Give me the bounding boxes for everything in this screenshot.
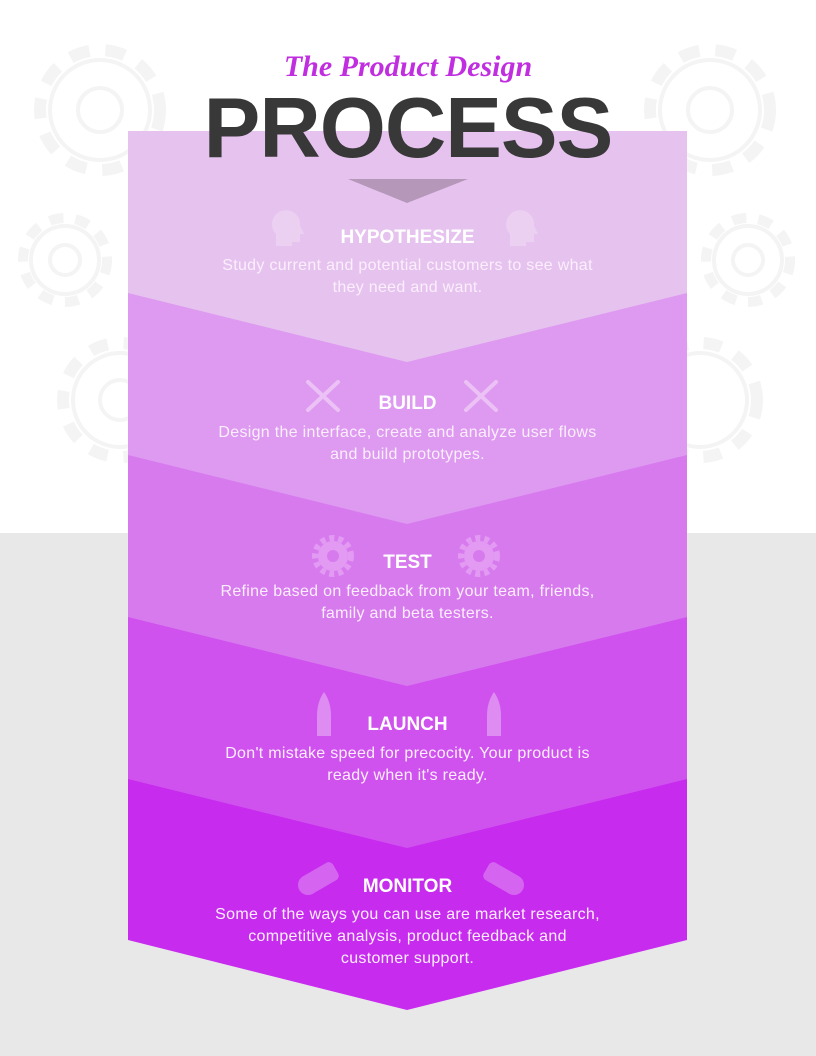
text: Refine based on feedback from your team, friends, [220, 583, 594, 600]
text: Some of the ways you can use are market research, [215, 906, 600, 923]
icon: heads [272, 210, 538, 246]
text: Design the interface, create and analyze user flows [218, 424, 597, 441]
title: PROCESS [204, 81, 612, 176]
step: launch: LAUNCH [367, 714, 448, 735]
text: Study current and potential customers to see what [222, 257, 593, 274]
background grey lower [0, 533, 816, 1056]
icon: gears [318, 541, 494, 571]
step: build: BUILD [378, 393, 437, 414]
text: they need and want. [333, 279, 482, 296]
step: hypothesize: HYPOTHESIZE [340, 227, 475, 248]
background gears [18, 44, 795, 462]
text: Don't mistake speed for precocity. Your product is [225, 745, 590, 762]
text: customer support. [341, 950, 474, 967]
step: monitor: MONITOR [363, 876, 452, 897]
text: competitive analysis, product feedback and [248, 928, 567, 945]
text: and build prototypes. [330, 446, 485, 463]
subtitle script: The Product Design [284, 50, 532, 83]
icon: tools [308, 382, 496, 410]
text: ready when it's ready. [327, 767, 488, 784]
arrow: down triangle [348, 179, 468, 203]
step: test: TEST [383, 552, 432, 573]
icon: cameras [298, 860, 524, 896]
text: family and beta testers. [321, 605, 494, 622]
icon: rockets [317, 692, 501, 736]
